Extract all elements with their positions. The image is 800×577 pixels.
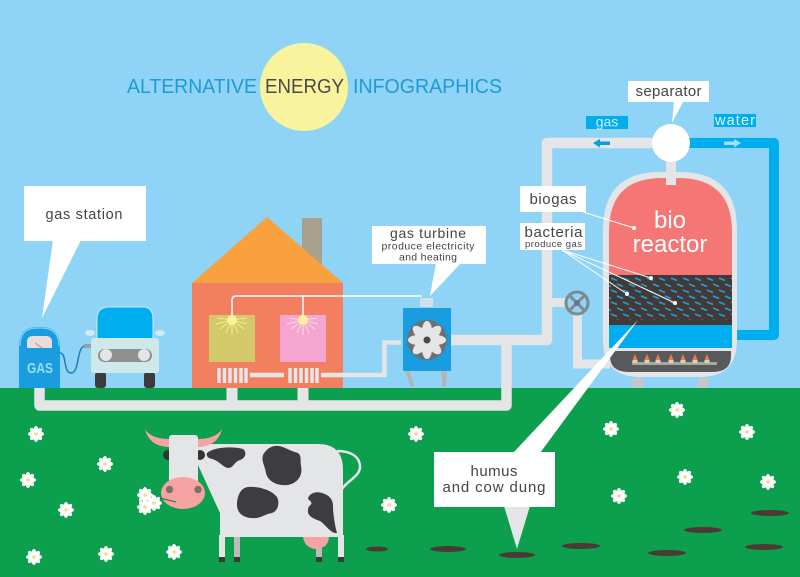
humus callout [434,320,638,549]
gas label: gas [596,114,618,130]
fan blades [408,321,446,359]
house [192,217,422,388]
turbine gas pipe [451,335,506,345]
walls [192,283,343,388]
mud patches [366,510,789,558]
far legs [234,535,240,557]
separator callout [628,81,709,123]
car body [91,338,159,373]
gas pipe network [40,143,660,406]
separator callout: separator [636,83,702,100]
car mirrors [85,330,95,336]
gas turbine callout: produce electricity [382,240,475,252]
bacteria and dung layer [609,275,732,325]
stand legs [405,371,447,387]
head [169,435,198,485]
green ground [0,388,800,577]
udder [303,536,329,549]
pump gauge [27,336,52,348]
bacteria dashes [609,276,732,320]
ears [163,450,173,460]
water layer [609,325,732,348]
pump body [19,327,60,388]
bioreactor [603,172,737,388]
title [127,75,502,98]
burner chamber [610,351,731,372]
car headlights [100,349,112,361]
window left [209,315,255,362]
daisies [20,402,776,565]
daisies in mouth [137,487,176,515]
separator sphere [652,124,690,162]
gas label [586,114,628,130]
water label: water [714,113,755,129]
bacteria callout: bacteria [524,224,583,241]
biogas callout [520,186,636,230]
gas station callout [24,186,146,318]
reactor legs [632,378,709,388]
biogas callout: biogas [530,191,576,208]
bacteria callout [520,223,677,305]
gas pump [19,327,90,388]
burner flames [632,354,717,365]
humus callout: humus [470,463,518,480]
gas turbine callout [372,225,486,296]
bacteria callout: produce gas [525,239,582,250]
nostrils [166,486,173,493]
spots [207,446,337,533]
gas turbine callout: and heating [399,252,457,264]
title: ENERGY [265,75,344,98]
reactor shell [603,172,737,377]
sun [260,43,348,131]
car fuel nozzle [84,344,93,348]
roof [192,217,343,283]
radiators [219,368,317,383]
icon: valve [566,292,588,314]
title: ALTERNATIVE [127,75,257,98]
chimney [302,218,322,268]
car [84,307,165,388]
bioreactor: reactor [633,231,707,258]
fan disc [407,320,447,360]
arrow: water flow [724,139,741,148]
turbine body [403,308,451,371]
pump label: GAS [27,360,53,377]
separator neck [666,160,676,185]
muzzle [161,477,205,509]
ground pipe branches to house [232,388,303,403]
car grille [98,349,152,362]
cow [137,429,360,562]
reactor label: bio [654,207,686,234]
wiring [232,296,422,319]
sky background [0,0,800,388]
biogas chamber [609,178,732,275]
hooves [219,557,344,562]
humus callout: and cow dung [442,479,546,496]
pump top highlight [20,328,59,346]
horns [145,429,170,447]
title: INFOGRAPHICS [353,75,502,98]
heating pipe [250,342,401,375]
turbine top coil [420,300,433,306]
window right [280,315,326,362]
body [198,444,343,537]
near legs [219,535,225,557]
lamp rays [216,318,247,335]
gas turbine callout: gas turbine [390,225,466,241]
car wheels [95,372,106,388]
arrow: gas flow [593,139,610,148]
tail [337,451,360,489]
lamps [227,315,237,325]
valve branch pipe [552,302,610,364]
gas turbine [403,300,451,387]
water pipe [685,143,774,335]
gas station callout: gas station [46,207,122,223]
car cabin [97,307,153,340]
hose [60,346,90,373]
